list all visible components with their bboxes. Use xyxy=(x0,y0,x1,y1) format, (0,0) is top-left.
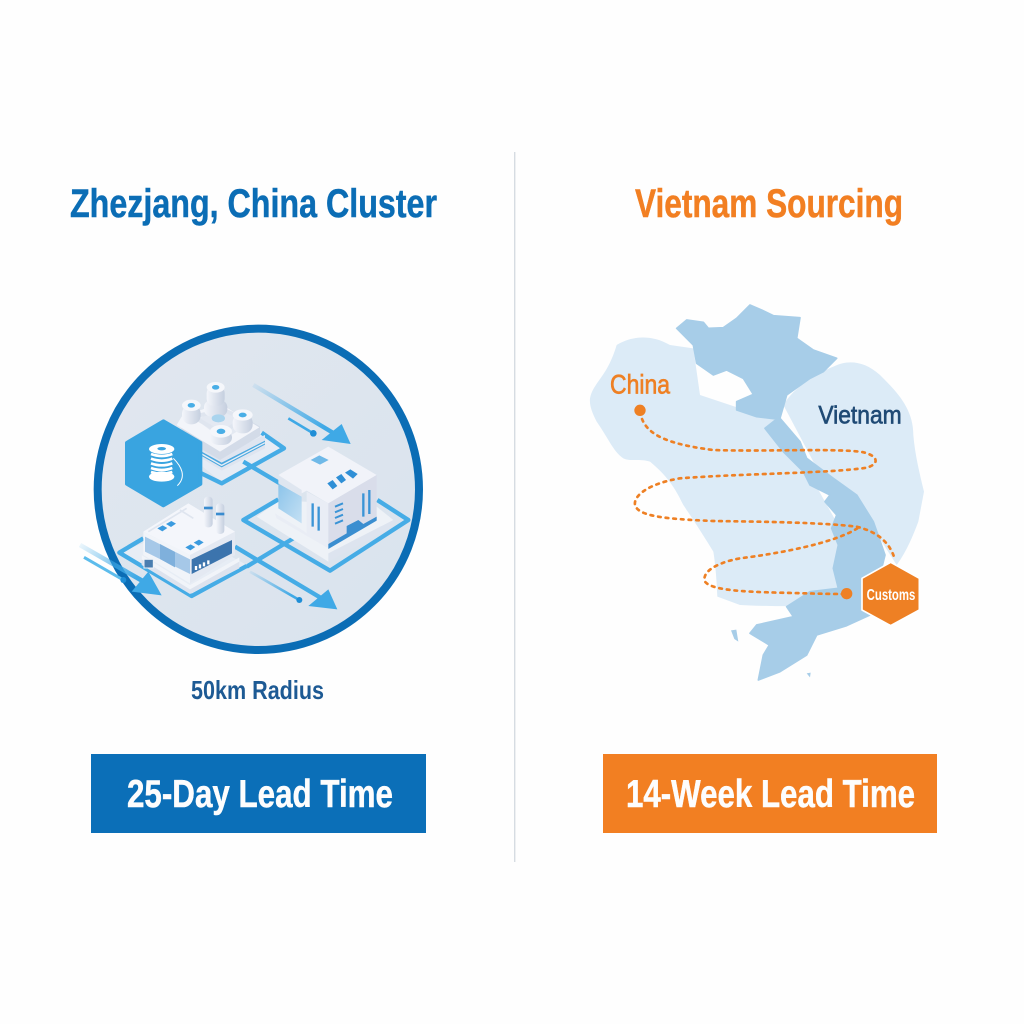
right main factory xyxy=(243,447,408,571)
label: China with origin pin xyxy=(610,369,670,416)
light region right lobe xyxy=(783,362,924,565)
customs hexagon: Customs xyxy=(867,587,916,604)
light region left lobe xyxy=(590,337,843,606)
illustration: industrial cluster circle xyxy=(80,329,419,650)
label: Vietnam: Vietnam xyxy=(818,401,902,429)
destination dot xyxy=(841,588,852,599)
title: Zhezjang, China Cluster: Zhezjang, China Cluster xyxy=(70,182,437,226)
title: Vietnam Sourcing: Vietnam Sourcing xyxy=(635,182,903,226)
connecting conveyor lines xyxy=(235,462,320,597)
top-left yarn factory xyxy=(177,382,284,483)
customs hexagon xyxy=(862,562,919,626)
badge: 25-Day Lead Time: 25-Day Lead Time xyxy=(127,773,393,816)
radius disc xyxy=(98,329,419,650)
dotted route line xyxy=(635,412,895,594)
badge: 14-Week Lead Time xyxy=(603,754,937,833)
map: China to Vietnam route xyxy=(590,305,924,680)
label: China with origin pin: China xyxy=(610,369,670,399)
icon: yarn spool hexagon xyxy=(127,421,201,506)
badge: 14-Week Lead Time: 14-Week Lead Time xyxy=(626,773,915,816)
flow arrow: top right xyxy=(253,385,351,444)
badge: 25-Day Lead Time xyxy=(91,754,426,833)
dark Vietnam shape xyxy=(677,305,885,680)
lower-left factory xyxy=(119,497,247,596)
label: 50km Radius: 50km Radius xyxy=(191,675,324,705)
flow arrow: lower left xyxy=(80,545,162,595)
flow arrow: lower right xyxy=(250,572,337,609)
